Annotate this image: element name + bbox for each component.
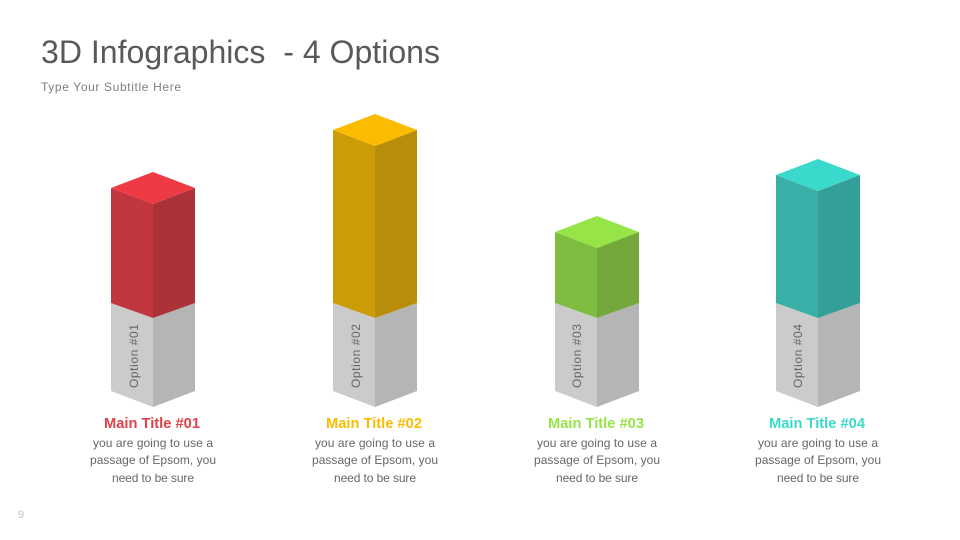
text block: option 01: you are going to use a	[93, 436, 213, 450]
text block: option 01: passage of Epsom, you	[90, 453, 216, 467]
text block: option 02: you are going to use a	[315, 436, 435, 450]
title: 3D Infographics - 4 Options	[41, 34, 440, 70]
heading: main title 01: Main Title #01	[104, 416, 200, 432]
heading: main title 02: Main Title #02	[326, 416, 422, 432]
text block: option 04: need to be sure	[777, 471, 859, 485]
text block: option 03	[534, 416, 660, 485]
label: option 02: Option #02	[349, 324, 363, 388]
subtitle: Type Your Subtitle Here	[41, 80, 181, 94]
text block: option 02: passage of Epsom, you	[312, 453, 438, 467]
label: option 01: Option #01	[127, 324, 141, 388]
text block: option 02: need to be sure	[334, 471, 416, 485]
text block: option 04	[755, 416, 881, 485]
text block: option 03: passage of Epsom, you	[534, 453, 660, 467]
label: option 04: Option #04	[791, 324, 805, 388]
text block: option 01: need to be sure	[112, 471, 194, 485]
column: option 04	[776, 159, 860, 407]
text block: option 03: need to be sure	[556, 471, 638, 485]
text block: option 03: you are going to use a	[537, 436, 657, 450]
page number: 9	[18, 509, 24, 521]
column: option 02	[333, 114, 417, 407]
column: option 01	[111, 172, 195, 407]
column: option 03	[555, 216, 639, 407]
heading: main title 04: Main Title #04	[769, 416, 865, 432]
text block: option 02	[312, 416, 438, 485]
heading: main title 03: Main Title #03	[548, 416, 644, 432]
text block: option 01	[90, 416, 216, 485]
text block: option 04: passage of Epsom, you	[755, 453, 881, 467]
label: option 03: Option #03	[570, 324, 584, 388]
text block: option 04: you are going to use a	[758, 436, 878, 450]
